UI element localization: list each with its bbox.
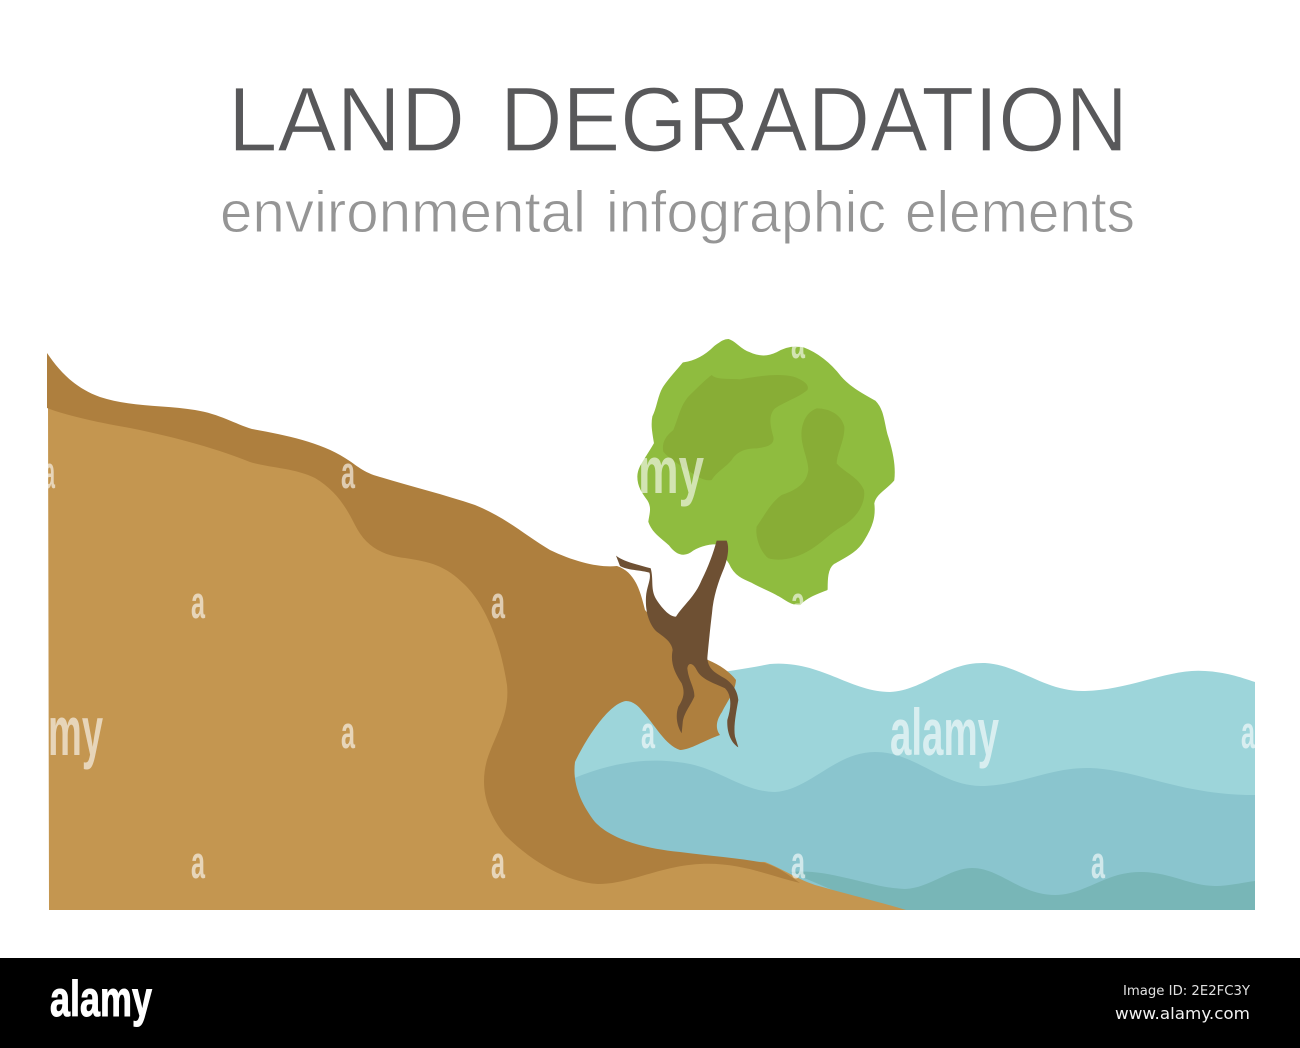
title: LAND — [228, 69, 465, 171]
land: lower soil layer — [48, 398, 906, 910]
watermark: repeated alamy marks: a — [641, 707, 656, 758]
watermark: repeated alamy marks — [44, 317, 1256, 888]
watermark: repeated alamy marks: a — [341, 707, 356, 758]
water: deep layer — [790, 868, 1255, 910]
water: light surface layer — [560, 663, 1255, 910]
tree: crown — [638, 340, 894, 604]
watermark: repeated alamy marks: a — [191, 577, 206, 628]
watermark: repeated alamy marks: a — [341, 447, 356, 498]
watermark: repeated alamy marks: a — [791, 837, 806, 888]
footer: website: www.alamy.com — [1115, 1004, 1250, 1023]
tree: crown shadow left — [663, 375, 808, 480]
subtitle — [220, 180, 1135, 245]
subtitle: infographic — [606, 180, 886, 245]
water — [560, 663, 1255, 910]
land: eroding hillside — [47, 353, 906, 910]
watermark: repeated alamy marks: a — [791, 317, 806, 368]
watermark: repeated alamy marks: a — [191, 837, 206, 888]
land: upper darker soil with overhang — [47, 353, 800, 884]
footer: alamy logo: alamy — [50, 971, 152, 1027]
watermark: repeated alamy marks: alamy — [890, 695, 999, 769]
watermark: repeated alamy marks: a — [1241, 707, 1256, 758]
water: middle layer — [565, 752, 1255, 910]
watermark: repeated alamy marks: a — [791, 577, 806, 628]
watermark: repeated alamy marks: a — [491, 577, 506, 628]
watermark: repeated alamy marks: a — [44, 447, 55, 498]
watermark: repeated alamy marks: my — [48, 692, 103, 770]
tree: crown shadow right — [756, 408, 864, 560]
subtitle: environmental — [220, 180, 586, 245]
watermark: repeated alamy marks: a — [1091, 837, 1106, 888]
footer bar — [0, 958, 1300, 1048]
footer: image id: Image ID: 2E2FC3Y — [1123, 984, 1250, 999]
title: DEGRADATION — [500, 69, 1128, 171]
title — [228, 69, 1128, 171]
tree — [616, 340, 894, 747]
watermark: repeated alamy marks: my — [638, 433, 704, 507]
watermark: repeated alamy marks: a — [491, 837, 506, 888]
tree: trunk and exposed roots — [616, 541, 738, 747]
subtitle: elements — [905, 180, 1135, 245]
